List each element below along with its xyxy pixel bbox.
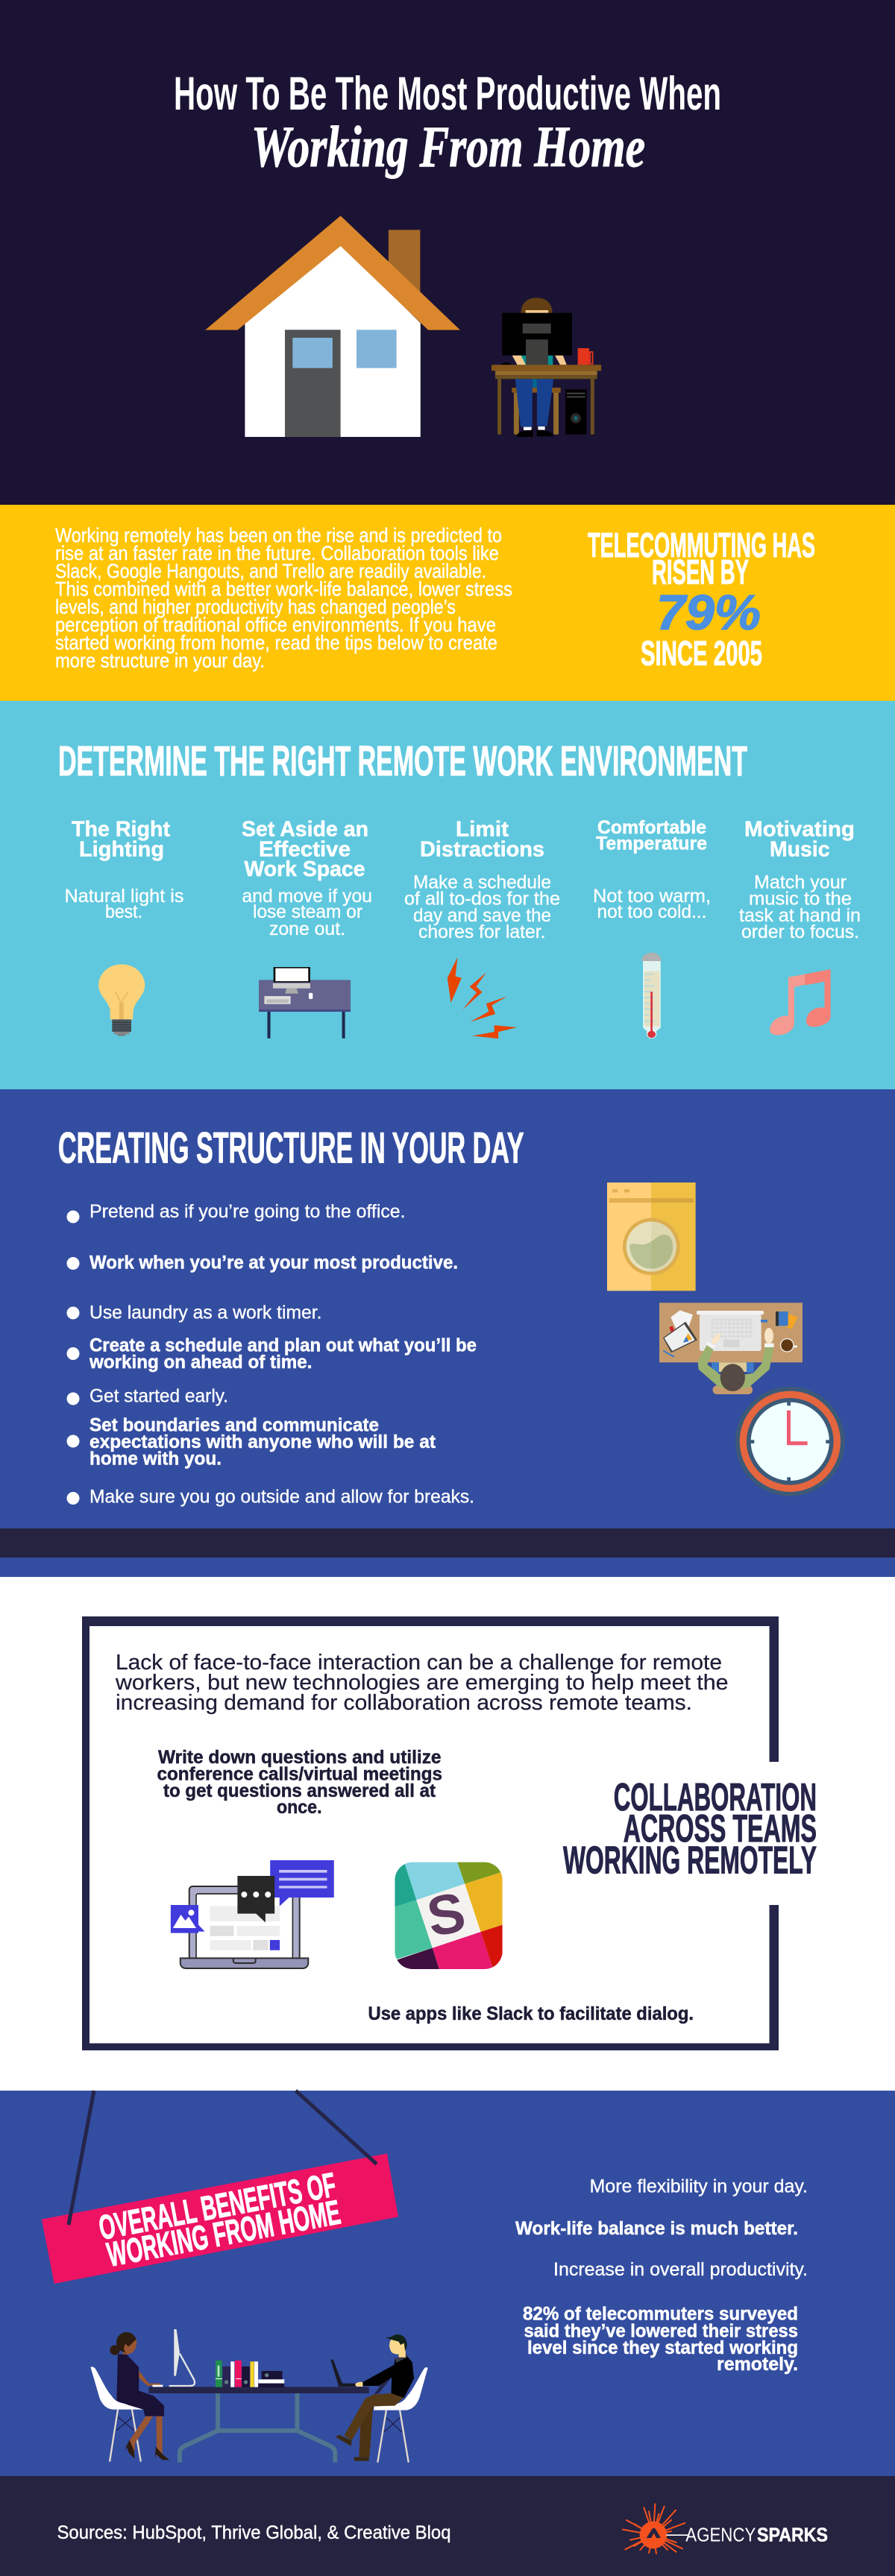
bullet list bbox=[67, 1201, 477, 1508]
heading: CREATING STRUCTURE IN YOUR DAY bbox=[58, 1124, 524, 1172]
icon: laptop with chat bubbles bbox=[171, 1860, 334, 1968]
icon: light bulb bbox=[98, 964, 145, 1036]
column: comfortable temperature bbox=[593, 817, 711, 922]
icon: clock bbox=[735, 1387, 845, 1496]
column: effective work space: Set Aside an bbox=[242, 817, 368, 841]
frame border bbox=[82, 1616, 779, 2050]
illustration: two people at a table bbox=[91, 2329, 428, 2463]
panel: collaboration bbox=[82, 1616, 817, 2050]
intro paragraph: Slack, Google Hangouts, and Trello are readily available. bbox=[55, 560, 486, 582]
column: comfortable temperature: Temperature bbox=[596, 834, 707, 854]
intro text: Lack of face-to-face interaction can be a challenge for remote bbox=[116, 1651, 722, 1675]
bullet list: Pretend as if you’re going to the office. bbox=[90, 1201, 406, 1222]
column: limit distractions: day and save the bbox=[413, 905, 551, 926]
benefits list: remotely. bbox=[717, 2354, 798, 2375]
column: motivating music: Music bbox=[770, 838, 829, 862]
intro text: increasing demand for collaboration across remote teams. bbox=[116, 1691, 692, 1715]
column: effective work space bbox=[242, 817, 372, 939]
column: effective work space: Effective bbox=[259, 838, 351, 862]
bullet list: Use laundry as a work timer. bbox=[90, 1302, 322, 1323]
column: the right lighting bbox=[64, 817, 183, 922]
column: the right lighting: Natural light is bbox=[64, 886, 183, 907]
tip: write down questions bbox=[157, 1747, 442, 1818]
column: comfortable temperature: Not too warm, bbox=[593, 886, 711, 907]
benefits list: 82% of telecommuters surveyed bbox=[523, 2304, 798, 2325]
column: limit distractions: of all to-dos for the bbox=[404, 889, 560, 910]
sources: Sources: HubSpot, Thrive Global, & Creative Bloq bbox=[57, 2522, 450, 2543]
hanging banner: OVERALL BENEFITS OF bbox=[95, 2164, 339, 2247]
column: motivating music bbox=[739, 817, 861, 942]
panel: footer bbox=[0, 2476, 895, 2576]
column: the right lighting: The Right bbox=[72, 817, 170, 841]
icon: desk with computer bbox=[259, 967, 351, 1039]
column: motivating music: order to focus. bbox=[741, 922, 859, 942]
hanging banner bbox=[42, 2091, 398, 2284]
column: effective work space: zone out. bbox=[269, 919, 345, 939]
intro text bbox=[115, 1651, 728, 1715]
icon: thermometer bbox=[641, 953, 661, 1039]
logo: agency sparks bbox=[623, 2504, 828, 2554]
intro paragraph: started working from home, read the tips below to create bbox=[55, 632, 497, 654]
column: motivating music: task at hand in bbox=[739, 905, 861, 926]
column: the right lighting: best. bbox=[105, 901, 142, 922]
icon: lightning bolts bbox=[448, 957, 517, 1039]
heading bbox=[563, 1776, 817, 1882]
column: motivating music: music to the bbox=[749, 889, 852, 910]
column: effective work space: Work Space bbox=[245, 857, 365, 881]
column: effective work space: lose steam or bbox=[253, 901, 362, 922]
panel: overall benefits bbox=[0, 2091, 895, 2476]
benefits list: More flexibility in your day. bbox=[589, 2176, 808, 2196]
bullet list: expectations with anyone who will be at bbox=[90, 1432, 436, 1452]
intro paragraph: levels, and higher productivity has changed people’s bbox=[55, 596, 456, 618]
icon: washing machine bbox=[607, 1182, 696, 1291]
footer band bbox=[0, 1528, 895, 1558]
intro paragraph bbox=[55, 524, 512, 672]
icon: house bbox=[205, 215, 460, 437]
intro paragraph: rise at an faster rate in the future. Collaboration tools like bbox=[55, 542, 499, 564]
icon: person working at desk from above bbox=[659, 1303, 803, 1394]
callout: 79% statistic: RISEN BY bbox=[652, 552, 749, 591]
panel: intro bbox=[0, 505, 895, 701]
benefits list: said they’ve lowered their stress bbox=[524, 2320, 798, 2341]
bullet list: Get started early. bbox=[90, 1385, 228, 1406]
column: motivating music: Motivating bbox=[744, 817, 855, 841]
caption: slack: Use apps like Slack to facilitate dialog. bbox=[368, 2003, 694, 2024]
column: limit distractions: Distractions bbox=[420, 838, 544, 862]
column: limit distractions: Make a schedule bbox=[413, 872, 551, 893]
column: effective work space: and move if you bbox=[242, 886, 372, 907]
hanging banner: WORKING FROM HOME bbox=[104, 2192, 343, 2274]
intro text: workers, but new technologies are emerging to help meet the bbox=[115, 1671, 728, 1695]
tip: write down questions: to get questions answered all at bbox=[163, 1780, 436, 1801]
bullet list: Make sure you go outside and allow for breaks. bbox=[90, 1487, 474, 1508]
column: motivating music: Match your bbox=[754, 872, 847, 893]
column: comfortable temperature: not too cold... bbox=[597, 901, 707, 922]
callout: 79% statistic: 79% bbox=[656, 585, 761, 640]
tip: write down questions: once. bbox=[277, 1797, 322, 1818]
column: limit distractions bbox=[404, 817, 560, 942]
intro paragraph: Working remotely has been on the rise and is predicted to bbox=[55, 524, 502, 547]
benefits list: Increase in overall productivity. bbox=[553, 2259, 808, 2280]
intro paragraph: perception of traditional office environments. If you have bbox=[55, 614, 496, 636]
tip: write down questions: conference calls/virtual meetings bbox=[157, 1764, 442, 1785]
bullet list: Work when you’re at your most productive. bbox=[90, 1253, 458, 1273]
benefits list bbox=[515, 2176, 808, 2375]
logo: agency sparks: SPARKS bbox=[757, 2523, 828, 2545]
icon: slack logo bbox=[395, 1862, 503, 1969]
logo: agency sparks: AGENCY bbox=[685, 2523, 756, 2545]
tip: write down questions: Write down questions and utilize bbox=[158, 1747, 442, 1768]
benefits list: level since they started working bbox=[527, 2337, 798, 2358]
intro paragraph: more structure in your day. bbox=[55, 649, 265, 672]
panel: header bbox=[0, 0, 895, 505]
icon: slack logo: S bbox=[422, 1880, 470, 1948]
subtitle: Working From Home bbox=[251, 114, 645, 179]
intro paragraph: This combined with a better work-life balance, lower stress bbox=[55, 578, 512, 600]
icon: person at desk bbox=[492, 297, 601, 437]
benefits list: Work-life balance is much better. bbox=[515, 2218, 798, 2239]
column: limit distractions: Limit bbox=[456, 817, 509, 841]
callout: 79% statistic: SINCE 2005 bbox=[641, 634, 762, 673]
icon: music note bbox=[770, 969, 831, 1035]
bullet list: Create a schedule and plan out what you’ll be bbox=[90, 1335, 477, 1355]
bullet list: working on ahead of time. bbox=[89, 1352, 313, 1373]
callout: 79% statistic bbox=[588, 526, 815, 673]
column: comfortable temperature: Comfortable bbox=[597, 817, 706, 838]
panel: remote work environment bbox=[0, 701, 895, 1089]
column: limit distractions: chores for later. bbox=[418, 922, 546, 942]
bullet list: home with you. bbox=[90, 1448, 222, 1469]
panel: structure in your day bbox=[0, 1089, 895, 1577]
bullet list: Set boundaries and communicate bbox=[90, 1415, 379, 1436]
column: the right lighting: Lighting bbox=[79, 838, 164, 862]
